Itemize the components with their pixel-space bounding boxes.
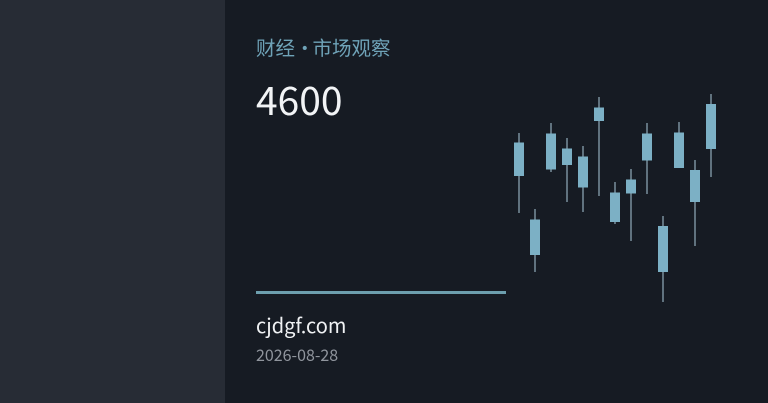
category heading [256, 32, 391, 60]
divider line [256, 291, 506, 294]
category heading: · [295, 32, 315, 60]
left sidebar panel [0, 0, 225, 403]
category heading: 财经 [256, 32, 295, 60]
date: 2026-08-28 [256, 342, 338, 366]
category heading: 市场观察 [312, 32, 391, 60]
main number: 4600 [256, 71, 343, 127]
site name: cjdgf.com [256, 310, 346, 339]
